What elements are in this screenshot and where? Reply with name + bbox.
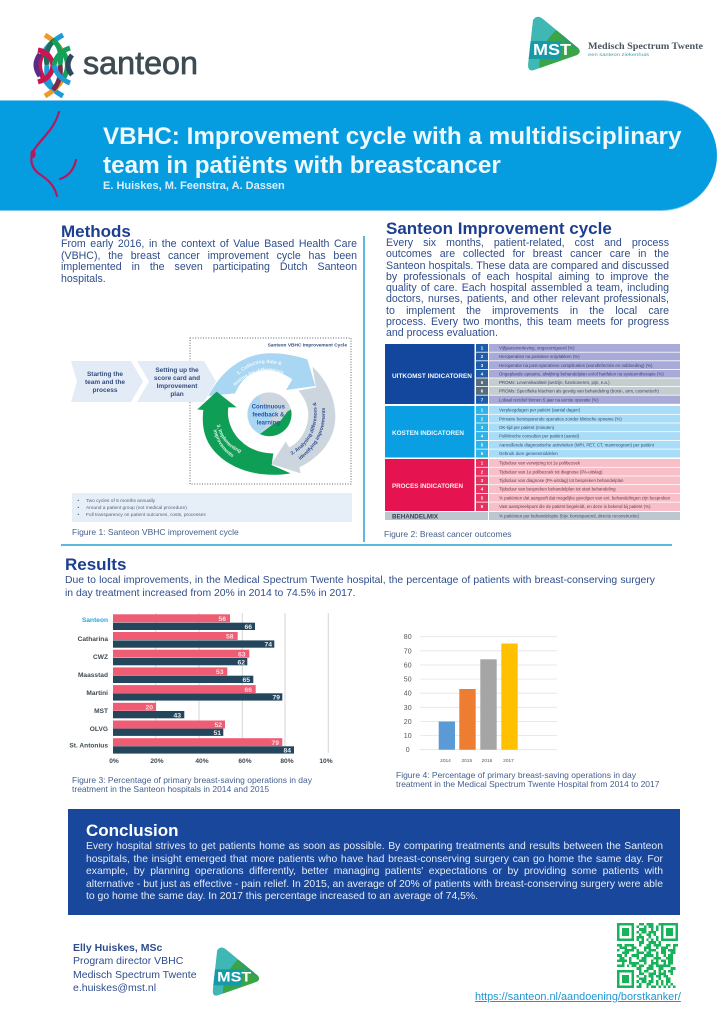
table group: kosten: Gebruik dure geneesmiddelen: [499, 451, 558, 456]
text: improvement cycle: and process evaluation.: [386, 327, 498, 339]
table group: proces: % patiënten dat aangeeft dat mogelijke gevolgen van evt. behandelingen zijn besproken: [499, 495, 671, 500]
caption: figure 4: [396, 770, 660, 789]
text: results: Due to local improvements, in the Medical Spectrum Twente hospital, the percentage of patients with breast-conserving surgery: [65, 575, 655, 586]
table group: proces: 5: [481, 495, 484, 500]
table group: proces: Tijdsduur van verwijzing tot 1e polibezoek: [499, 461, 581, 466]
table group: kosten: 2: [481, 416, 484, 421]
bar: 2014: [439, 722, 455, 750]
bullets box: •: [78, 499, 80, 504]
text: methods: hospitals.: [61, 273, 106, 285]
table group: proces: Vast aanspreekpunt die de patiënt begeleidt, en deze is bekend bij patiënt (%): [499, 504, 651, 509]
heading: conclusion: Conclusion: [86, 821, 179, 840]
table group: uitkomst: Vijfjaarsoverleving, ongecorrigeerd (%): [499, 346, 575, 351]
x axis labels: 0%: [109, 758, 119, 765]
logo: Medisch Spectrum Twente: Medisch Spectrum Twente: [588, 41, 704, 52]
caption: figure 3: Figure 3: Percentage of primary breast-saving operations in day: [72, 775, 312, 785]
x axis labels: 2017: [503, 758, 514, 764]
y axis labels: [404, 634, 412, 754]
text: conclusion: [86, 841, 663, 902]
chevron: setting up score card: plan: [170, 391, 184, 398]
bullets box: [72, 493, 352, 522]
divider: vertical: [363, 236, 364, 542]
text: methods: From early 2016, in the context of Value Based Health Care: [61, 238, 357, 250]
table group: kosten: 6: [481, 451, 484, 456]
table group: proces: 4: [481, 487, 484, 492]
table group: kosten: Verpleegdagen per patiënt (aantal dagen): [499, 408, 581, 413]
values: 2015: 79: [272, 695, 280, 702]
heading: results: Results: [65, 555, 126, 574]
hospital labels: [69, 617, 108, 750]
bar: 2016: [480, 659, 497, 750]
text: improvement cycle: Santeon hospitals. These data are compared and discussed: [386, 260, 669, 272]
bullets box: Full transparency on patient outcomes, costs, processes: [86, 512, 206, 518]
table group: proces: Tijdsduur van diagnose (PA-uitslag) tot bespreken behandelplan: [499, 478, 624, 483]
chevron: starting the team: process: [93, 387, 118, 394]
hospital labels: CWZ: [93, 654, 108, 661]
text: conclusion: alternative - but just as effective - pain relief. In 2015, an average of 20% of patients with breast-conserving surgery were able: [86, 879, 663, 890]
contact block: Medisch Spectrum Twente: [73, 969, 197, 981]
values: 2014: 20: [145, 704, 153, 712]
center: continuous feedback: Continuous: [252, 404, 286, 410]
contact block: Elly Huiskes, MSc: [73, 942, 162, 954]
y axis labels: 80: [404, 634, 412, 641]
arrow: implementing improvements: 3. Implementing: [216, 424, 242, 454]
values: 2015: 65: [242, 677, 250, 684]
y axis labels: 50: [404, 677, 412, 684]
y axis labels: 40: [404, 691, 412, 698]
arrow: implementing improvements: [197, 392, 290, 475]
chevron: starting the team: team and the: [85, 379, 125, 386]
chevron: starting the team: [71, 361, 143, 402]
text: improvement cycle: [386, 237, 669, 339]
table group: proces: 2: [481, 469, 484, 474]
bar: 2017: [501, 644, 518, 750]
contact block: Program director VBHC: [73, 955, 183, 967]
values: 2014: 52: [214, 722, 222, 729]
text: methods: (VBHC), the breast cancer improvement cycle has been: [61, 250, 357, 262]
hospital labels: Martini: [86, 690, 108, 697]
hospital labels: Santeon: [82, 617, 108, 624]
table group: proces: 6: [481, 504, 484, 509]
logo: MST small: [212, 948, 260, 996]
bullets box: Two cycles of 6 months annually: [86, 498, 156, 504]
arrow: analysing differences: [272, 367, 336, 474]
values: 2015: 62: [237, 659, 245, 666]
table group: kosten: Primaire borstsparende operaties zonder klinische opname (%): [499, 416, 622, 421]
table group: uitkomst: 4: [481, 371, 484, 376]
caption: figure 3: [72, 775, 312, 794]
table group: kosten: KOSTEN INDICATOREN: [392, 430, 464, 437]
table group: kosten: Polikliniche consulten per patiënt (aantal): [499, 434, 580, 439]
text: improvement cycle: quality of care. Each hospital assembled a team, including: [386, 282, 669, 294]
text: methods: [61, 238, 357, 285]
text: conclusion: to go home the same day. In 2017 this percentage increased to an average of 74,5%.: [86, 891, 478, 902]
arrow: collecting data: testing for differences: [233, 368, 284, 386]
table group: proces: Tijdsduur van 1e polibezoek tot diagnose (PA-uitslag): [499, 469, 603, 474]
y axis labels: 70: [404, 648, 412, 655]
text: authors: E. Huiskes, M. Feenstra, A. Dassen: [103, 180, 285, 192]
x axis labels: 2016: [482, 758, 493, 764]
table group: uitkomst: 7: [481, 397, 484, 402]
logo: Medisch Spectrum Twente: [528, 16, 704, 70]
values: 2014: 58: [226, 634, 234, 641]
banner: title: [0, 100, 717, 211]
caption: figure 4: treatment in the Medical Spectrum Twente Hospital from 2014 to 2017: [396, 779, 659, 789]
x axis labels: 10%: [319, 758, 333, 765]
table group: behandelmix: [385, 512, 680, 521]
heading: poster title: team in patiënts with breastcancer: [103, 152, 501, 179]
text: improvement cycle: process. Every two months, this team meets for progress: [386, 316, 669, 328]
y axis labels: 10: [404, 733, 412, 740]
bars: 2015: [113, 623, 294, 754]
x axis labels: 20%: [150, 758, 164, 765]
divider: horizontal: [61, 544, 672, 546]
logo: Medisch Spectrum Twente: een santeon ziekenhuis: [588, 52, 650, 57]
values: 2014: 63: [238, 651, 246, 658]
y axis labels: 0: [406, 747, 410, 754]
x axis labels: 80%: [280, 758, 294, 765]
text: improvement cycle: outcomes are collected for breast cancer care in the: [386, 248, 669, 260]
table group: kosten: 1: [481, 408, 484, 413]
arrow: collecting data: [208, 353, 316, 396]
values: 2015: 66: [244, 624, 252, 631]
figure 3: horizontal bar chart by hospital: [69, 613, 333, 765]
table group: uitkomst: Ongeplande opname, afwijking behandelplan en/of hartfalen na systeemtherapie (%): [499, 371, 664, 376]
values: 2015: 74: [264, 642, 272, 649]
x axis labels: 60%: [238, 758, 252, 765]
bars: 2014: [113, 614, 282, 746]
caption: figure 3: treatment in the Santeon hospitals in 2014 and 2015: [72, 784, 269, 794]
heading: methods: Methods: [61, 222, 131, 241]
text: improvement cycle: doctors, nurses, patients, and other relevant professionals,: [386, 293, 669, 305]
logo: Medisch Spectrum Twente: MST: [533, 42, 572, 59]
table group: proces: [385, 459, 680, 511]
logo: santeon: [33, 32, 198, 98]
dotted frame: [190, 338, 351, 484]
values: 2015: 84: [283, 748, 291, 755]
text: results: [65, 575, 655, 599]
table group: kosten: 3: [481, 425, 484, 430]
text: improvement cycle: to implement the improvements in the local care: [386, 305, 669, 317]
chevron: setting up score card: Setting up the: [155, 367, 199, 374]
values: 2015: 51: [213, 730, 221, 737]
arrow: analysing differences: identifying improvements: [298, 408, 326, 460]
chevron: setting up score card: [137, 361, 216, 402]
values: 2014: 79: [271, 740, 279, 747]
y axis labels: 60: [404, 662, 412, 669]
table group: kosten: Aanvullende diagnostische activiteiten (MRI, PET, CT, mammogram) per patiënt: [499, 442, 655, 447]
chevron: setting up score card: Improvement: [157, 383, 198, 390]
values: 2014: 53: [216, 669, 224, 676]
dotted frame: Santeon VBHC Improvement Cycle: [268, 342, 347, 348]
table group: proces: 3: [481, 478, 484, 483]
link: santeon url: https://santeon.nl/aandoening/borstkanker/: [475, 991, 681, 1003]
text: results: in day treatment increased from 20% in 2014 to 74.5% in 2017.: [65, 588, 356, 599]
bullets box: •: [78, 506, 80, 511]
QR code: [617, 923, 678, 988]
figure 2: indicator table: [385, 344, 680, 521]
values: 2015: [173, 624, 291, 755]
center: continuous feedback: learning: [257, 420, 280, 426]
hospital labels: MST: [94, 708, 108, 715]
table group: kosten: [385, 406, 680, 458]
center: continuous feedback: [247, 392, 292, 436]
table group: uitkomst: Heroperatie na post-operatieve complicaties (wondinfecties en nabloeding) (%): [499, 363, 653, 368]
logo: MST small: MST: [217, 969, 252, 985]
text: improvement cycle: by professionals of each hospital aiming to improve the: [386, 271, 669, 283]
table group: uitkomst: 1: [481, 346, 484, 351]
hospital labels: OLVG: [90, 726, 108, 733]
text: conclusion: example, by planning operations differently, better managing patients' expectations or by providing some patients with: [86, 866, 663, 877]
hospital labels: Catharina: [78, 636, 108, 643]
hospital labels: Maasstad: [78, 672, 108, 679]
table group: kosten: 4: [481, 434, 484, 439]
contact block: e.huiskes@mst.nl: [73, 982, 156, 994]
values: 2014: [145, 616, 279, 747]
y axis labels: 20: [404, 719, 412, 726]
caption: figure 4: Figure 4: Percentage of primary breast-saving operations in day: [396, 770, 636, 780]
table group: uitkomst: 6: [481, 389, 484, 394]
caption: figure 1: Figure 1: Santeon VBHC improvement cycle: [72, 527, 239, 537]
text: improvement cycle: Every six months, patient-related, cost and process: [386, 237, 669, 249]
x axis labels: 2014: [440, 758, 451, 764]
bar: 2015: [459, 689, 476, 750]
heading: poster title: VBHC: Improvement cycle with a multidisciplinary: [103, 123, 681, 150]
x axis labels: [109, 758, 333, 765]
x axis labels: [440, 758, 514, 764]
figure 4: column chart 2014-2017: [404, 634, 557, 764]
icon: breast outline: [30, 110, 78, 198]
arrow: collecting data: 1. Collecting data &: [236, 359, 282, 375]
table group: kosten: 5: [481, 442, 484, 447]
table group: uitkomst: Heroperaties na positieve snijvlakken (%): [499, 354, 580, 359]
table group: behandelmix: % patiënten per behandeloptie (bijv. borstsparend, directe reconstructie): [499, 514, 640, 519]
center: continuous feedback: feedback &: [252, 412, 285, 418]
table group: proces: PROCES INDICATOREN: [392, 483, 463, 490]
cycle rings: [197, 353, 336, 475]
hospital labels: St. Antonius: [69, 742, 108, 750]
table group: uitkomst: [385, 344, 680, 404]
table group: uitkomst: 5: [481, 380, 484, 385]
chevron: starting the team: Starting the: [87, 371, 123, 378]
bullets box: Around a patient group (not medical procedure): [86, 505, 187, 511]
logo: santeon: santeon: [83, 45, 198, 81]
y axis labels: 30: [404, 705, 412, 712]
contact block: [73, 942, 197, 994]
figure 1: improvement cycle diagram: [71, 338, 352, 522]
caption: figure 2: Figure 2: Breast cancer outcomes: [384, 529, 512, 539]
table group: proces: Tijdsduur van bespreken behandelplan tot start behandeling: [499, 487, 616, 492]
table group: uitkomst: PROMs: Specifieke klachten als gevolg van behandeling (borst-, arm, cosmetisch): [499, 389, 659, 394]
text: methods: implemented in the seven participating Dutch Santeon: [61, 261, 357, 273]
grid lines: [420, 637, 557, 750]
heading: santeon improvement cycle: Santeon Improvement cycle: [386, 219, 612, 238]
text: conclusion: Every hospital strives to get patients home as soon as possible. By comparing treatments and results between the Santeon: [86, 841, 663, 852]
table group: proces: 1: [481, 461, 484, 466]
table group: uitkomst: PROMs: Levenskwaliteit (welzijn, functioneren, pijn, e.a.): [499, 380, 610, 385]
values: 2014: 66: [244, 687, 252, 694]
panel: conclusion: [68, 809, 680, 915]
heading: poster title: [103, 123, 682, 179]
text: conclusion: hospitals, the insight emerged that more patients who have had breast-conserving surgery can go home the same day. For: [86, 854, 663, 865]
table group: kosten: OK-tijd per patiënt (minuten): [499, 425, 555, 430]
arrow: analysing differences: 2. Analysing differences &: [290, 402, 317, 455]
chevron: setting up score card: score card and: [154, 375, 200, 382]
arrow: implementing improvements: improvements: [214, 429, 234, 457]
table group: uitkomst: Lokaal recidief binnen 5 jaar na eerste operatie (%): [499, 397, 599, 402]
grid lines: [156, 613, 328, 753]
table group: uitkomst: 2: [481, 354, 484, 359]
table group: uitkomst: UITKOMST INDICATOREN: [392, 373, 472, 380]
bullets box: •: [78, 513, 80, 518]
table group: behandelmix: BEHANDELMIX: [392, 514, 439, 521]
x axis labels: 40%: [195, 758, 209, 765]
x axis labels: 2015: [461, 758, 472, 764]
values: 2014: 56: [218, 616, 226, 623]
values: 2015: 43: [173, 712, 181, 719]
table group: uitkomst: 3: [481, 363, 484, 368]
